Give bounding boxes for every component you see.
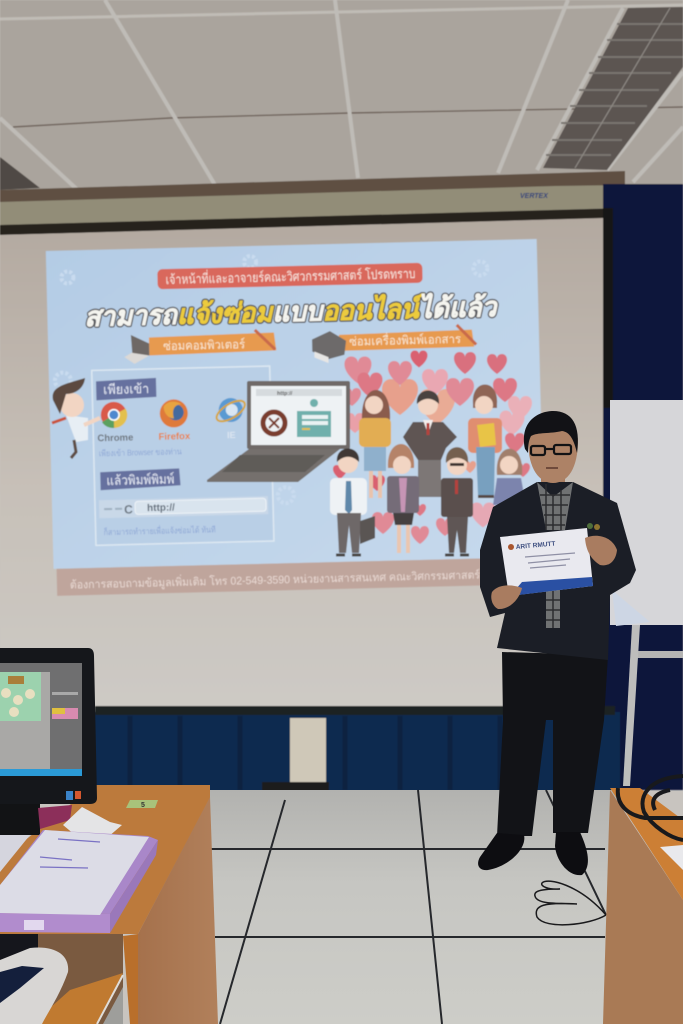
tissue (63, 807, 122, 837)
purple folder and paper (0, 830, 158, 933)
tag: printer repair: ซ่อมเครื่องพิมพ์เอกสาร (349, 330, 462, 349)
monitor screen (0, 663, 82, 776)
address bar: C (124, 502, 133, 517)
monitor stand (0, 803, 40, 835)
notice pill: เจ้าหน้าที่และอาจายร์คณะวิศวกรรมศาสตร์ โปรดทราบ (165, 265, 416, 287)
whiteboard (610, 400, 683, 786)
slide background (46, 239, 544, 569)
plaid shirt (537, 482, 573, 628)
tag: computer repair (124, 329, 277, 364)
brand label: VERTEX (520, 193, 549, 200)
character: mascot repairman (52, 378, 100, 458)
certificate logo text: ARIT RMUTT (516, 541, 556, 551)
curtain right side (603, 184, 683, 790)
desk number tag (126, 800, 158, 809)
face (528, 429, 578, 483)
character: girl (493, 449, 526, 505)
character: woman in red with folder (468, 384, 502, 498)
underside of the desk (0, 934, 123, 1024)
big laptop illustration (207, 381, 350, 482)
desktop monitor (0, 648, 97, 804)
cloth on the shelf (0, 947, 68, 1024)
hair (524, 411, 578, 453)
character: man in white shirt (330, 448, 375, 555)
desk number tag: 5 (141, 802, 145, 809)
shoes (478, 832, 588, 875)
curtain below screen (90, 712, 620, 792)
icon: IE: IE (227, 430, 236, 440)
icon: gear and tools (263, 412, 285, 434)
projection screen housing (0, 171, 625, 235)
presenter (478, 411, 636, 875)
character: woman in yellow (359, 390, 391, 498)
pink cloth (38, 805, 72, 829)
left desk (0, 785, 218, 1024)
slide footer strip: ต้องการสอบถามข้อมูลเพิ่มเติม โทร 02-549-3590 หน่วยงานสารสนเทศ คณะวิศกรรมศาสตร์ ม (70, 566, 490, 592)
icon: Firefox (158, 399, 191, 443)
badge on jacket (587, 523, 600, 530)
projection screen (0, 218, 603, 708)
label: just enter (96, 378, 156, 400)
headline: สามารถแจ้งซ่อมแบบออนไลน์ได้แล้ว (84, 291, 498, 332)
character: man in dark suit (403, 390, 457, 497)
jacket (480, 482, 636, 660)
glasses (531, 445, 571, 455)
floor (210, 790, 620, 1024)
hearts cluster (333, 350, 532, 544)
tag: computer repair: ซ่อมคอมพิวเตอร์ (163, 337, 246, 353)
white box under the screen (262, 718, 329, 800)
browser footnote: ก็สามารถทำรายเพื่อแจ้งซ่อมได้ ทันที (104, 523, 216, 537)
hands (491, 536, 617, 609)
icon: Chrome: Chrome (97, 432, 133, 444)
cable on floor (535, 881, 606, 925)
trousers (497, 652, 608, 836)
headline: สามารถแจ้งซ่อมแบบออนไลน์ได้แล้ว (84, 291, 498, 332)
ceiling (0, 0, 683, 194)
monitor badges (66, 791, 81, 800)
paper on desk (660, 845, 683, 870)
big laptop illustration: http:// (277, 391, 293, 397)
browser note: เพียงเข้า Browser ของท่าน (99, 446, 182, 458)
certificate (500, 528, 593, 596)
headphones (618, 776, 683, 840)
icon: IE (213, 397, 249, 440)
slide footer strip (57, 557, 545, 596)
projected slide (46, 239, 545, 596)
label: just enter: เพียงเข้า (103, 381, 149, 397)
browser instructions panel (92, 366, 274, 545)
login form (297, 399, 331, 437)
address bar: http:// (147, 502, 175, 514)
right desk (603, 776, 683, 1024)
character: man with glasses (441, 447, 473, 555)
tag: printer repair (312, 325, 477, 364)
address bar (99, 496, 268, 518)
icon: Chrome (97, 401, 133, 444)
character: woman in purple suit (387, 444, 419, 553)
label: then type: แล้วพิมพ์พิมพ์ (106, 471, 175, 488)
ceiling light fixture (543, 7, 683, 170)
neck (541, 470, 565, 492)
icon: Firefox: Firefox (158, 431, 191, 443)
decorative gears (52, 250, 493, 509)
